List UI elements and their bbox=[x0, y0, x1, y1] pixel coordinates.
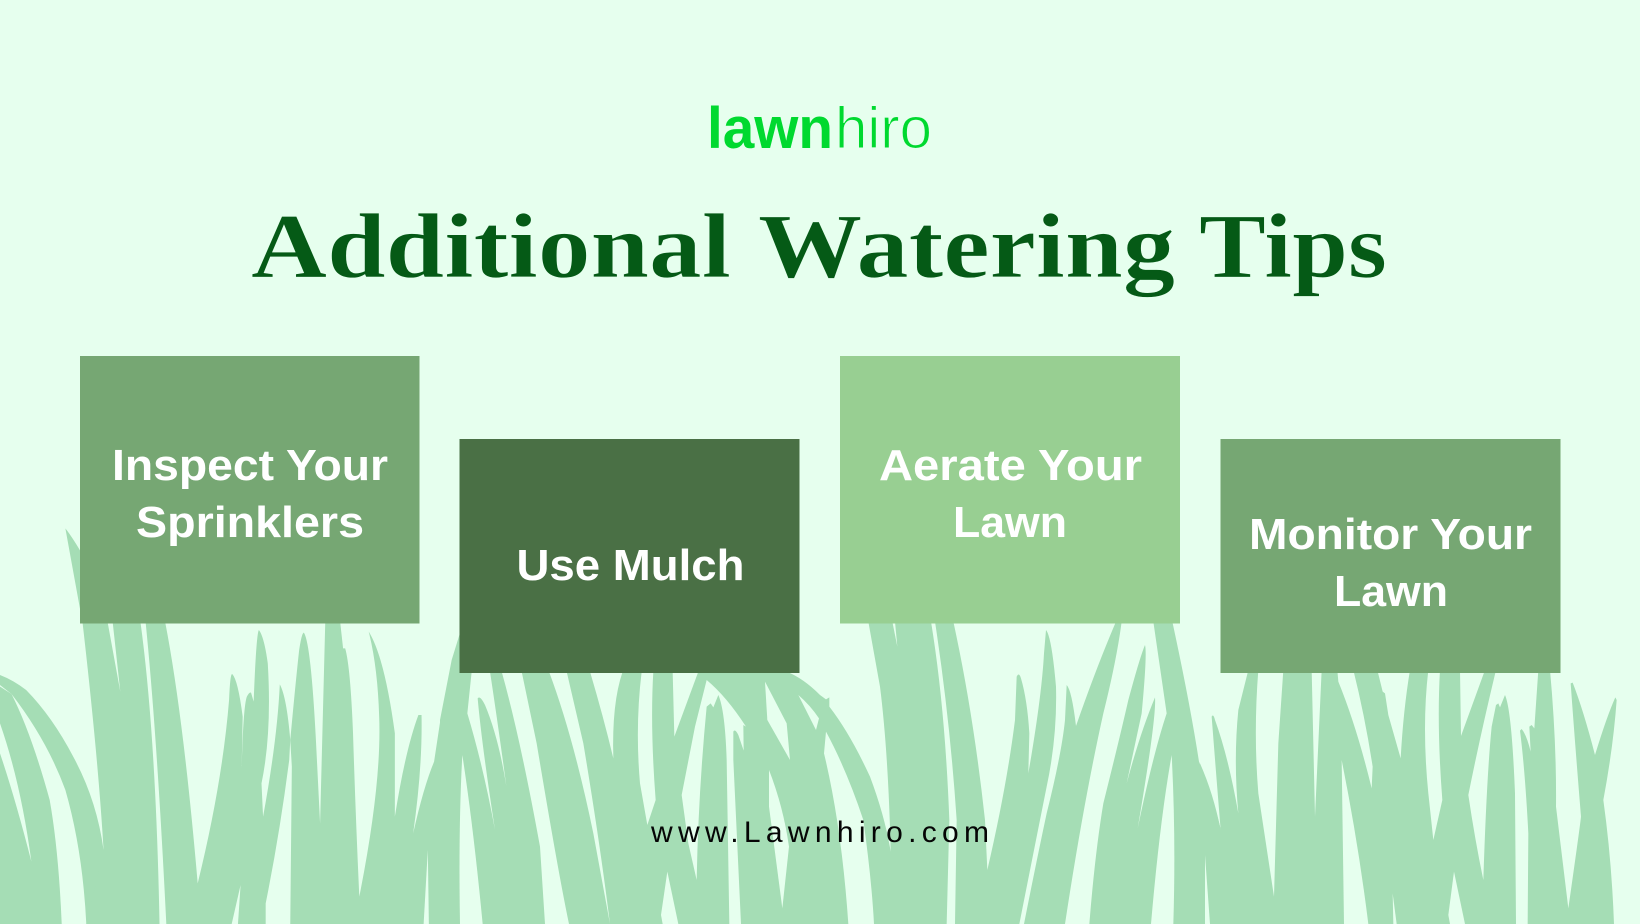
panel: monitor your lawn bbox=[1220, 439, 1560, 673]
title bbox=[251, 195, 1387, 297]
title: Watering bbox=[758, 195, 1175, 297]
panel: aerate your lawn: Aerate Your bbox=[879, 441, 1142, 490]
title: Additional bbox=[251, 195, 731, 297]
panel: monitor your lawn: Monitor Your bbox=[1249, 510, 1532, 559]
logo: lawnhiro: hiro bbox=[835, 96, 932, 161]
logo: lawnhiro bbox=[707, 96, 932, 161]
panel: use mulch bbox=[460, 439, 800, 673]
panel: aerate your lawn bbox=[840, 356, 1180, 624]
panel: inspect your sprinklers bbox=[80, 356, 420, 624]
grass illustration bbox=[0, 528, 1617, 924]
panel: inspect your sprinklers: Sprinklers bbox=[136, 498, 364, 547]
logo: lawnhiro: lawn bbox=[707, 96, 833, 161]
panel: aerate your lawn: Lawn bbox=[953, 498, 1067, 547]
panel: use mulch: Use Mulch bbox=[516, 541, 744, 590]
website url: www.Lawnhiro.com bbox=[650, 816, 989, 849]
panel: inspect your sprinklers: Inspect Your bbox=[112, 441, 388, 490]
title: Tips bbox=[1199, 195, 1387, 297]
panel: monitor your lawn: Lawn bbox=[1334, 567, 1448, 616]
